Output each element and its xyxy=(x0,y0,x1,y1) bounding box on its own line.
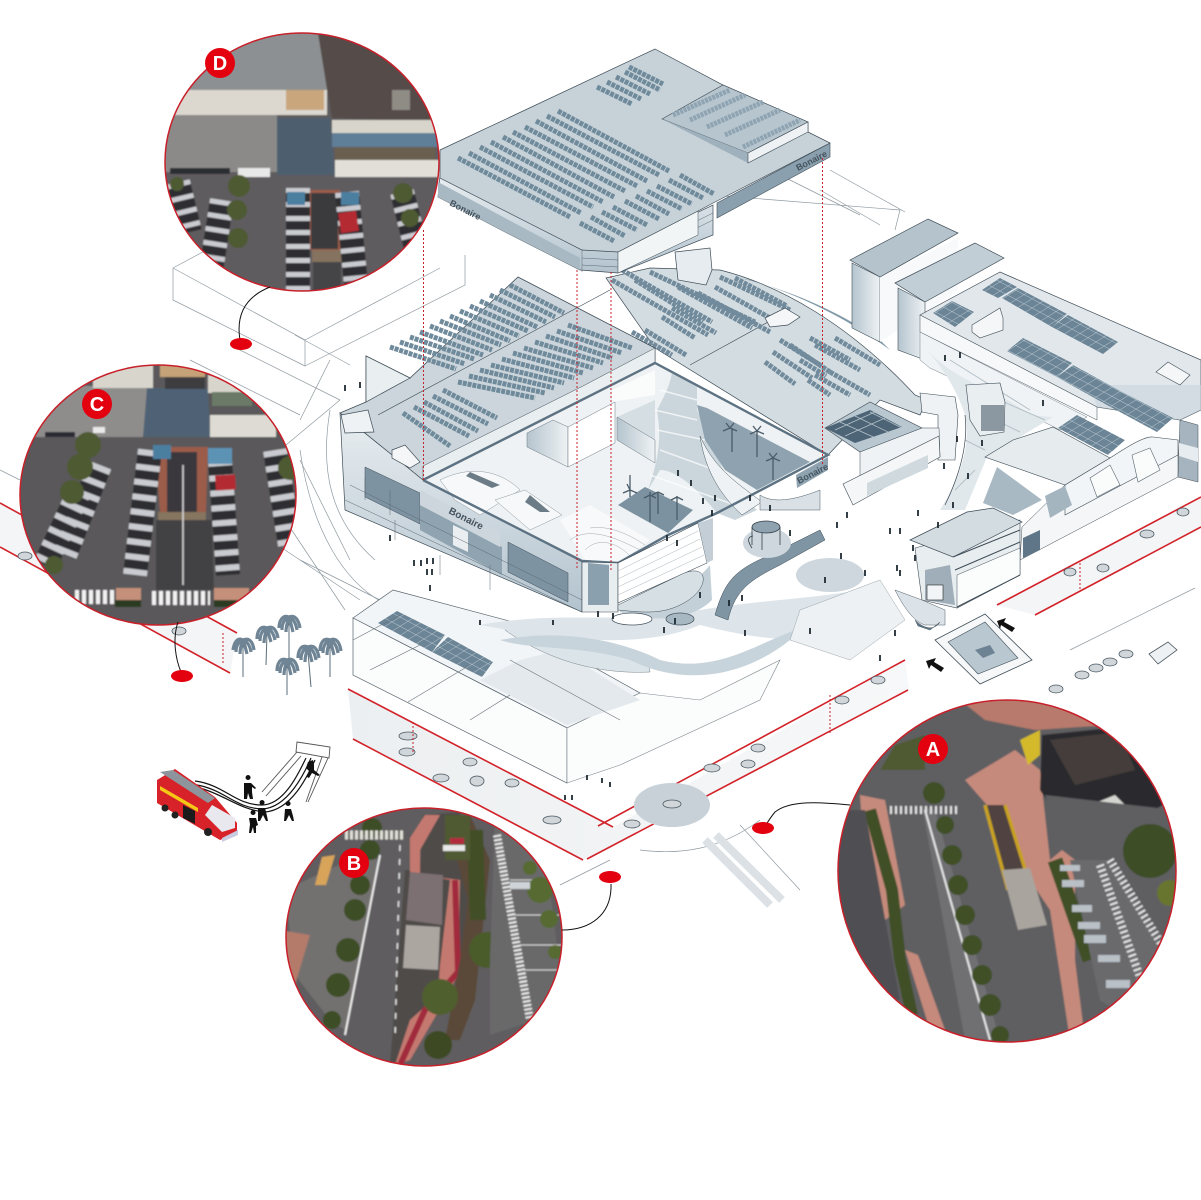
palms in interior xyxy=(623,423,780,522)
entrance building xyxy=(910,508,1022,608)
palm trees xyxy=(233,616,341,695)
middle roof solar rows xyxy=(612,270,880,395)
upper floating roof xyxy=(438,49,830,273)
aerial photo A xyxy=(830,695,1183,1045)
main roof solar rows xyxy=(390,285,632,446)
marker A xyxy=(918,734,948,764)
cutaway interior xyxy=(423,363,828,563)
upper floating roof: Bonaire xyxy=(794,149,829,173)
facade window panels and Bonaire sign: Bonaire xyxy=(447,506,485,533)
leader C xyxy=(171,622,193,682)
photo C border xyxy=(20,365,296,625)
red dotted drop lines xyxy=(223,158,1080,753)
photo D border xyxy=(165,33,439,291)
marker B: B xyxy=(347,853,361,875)
entrance canopy sculpture xyxy=(895,590,945,630)
fire hose xyxy=(195,758,315,812)
kiosk gazebo xyxy=(749,521,780,550)
fountain pad xyxy=(935,614,1032,684)
upper floating roof: Bonaire xyxy=(448,198,482,222)
right wing blocks xyxy=(850,219,1201,430)
lower annex building xyxy=(353,590,780,783)
road shading xyxy=(0,497,1201,905)
right wing solar arrays xyxy=(933,278,1173,432)
marker D xyxy=(205,48,235,78)
roundabout xyxy=(634,783,710,827)
pedestrians xyxy=(345,352,1043,800)
marker C: C xyxy=(90,394,104,416)
rooftop unit: skylight and vehicle xyxy=(341,248,800,468)
middle block with dark skylight xyxy=(825,402,940,505)
marker C xyxy=(82,389,112,419)
marker A: A xyxy=(926,739,940,761)
black direction arrows xyxy=(926,618,1015,672)
facade window panels and Bonaire sign xyxy=(345,467,582,612)
main building roof and facade xyxy=(340,277,655,612)
photo B border xyxy=(286,808,562,1066)
ground plan ghost outlines xyxy=(0,170,1195,890)
plaza ribbons xyxy=(480,528,905,675)
middle roof xyxy=(606,268,927,455)
street cars xyxy=(18,508,1189,828)
corner entrance and curved wall xyxy=(582,518,713,612)
tunnel entry frame xyxy=(262,742,330,802)
aerial photo B xyxy=(280,800,570,1070)
marker D: D xyxy=(213,53,227,75)
Bonaire sign on cut wall: Bonaire xyxy=(795,462,830,486)
red road lines xyxy=(0,497,1201,860)
roof units xyxy=(972,308,1190,385)
aerial photo C xyxy=(15,360,305,630)
upper roof solar rows xyxy=(458,67,714,241)
leader D xyxy=(230,287,270,350)
firefighters xyxy=(244,760,320,833)
fire truck xyxy=(157,769,238,842)
marker B xyxy=(339,848,369,878)
leader A xyxy=(752,803,850,834)
raised roof solar rows xyxy=(673,90,800,147)
atrium corridor xyxy=(920,350,1053,510)
right wing lower wall and wavy roof xyxy=(983,415,1198,560)
aerial photo D xyxy=(160,30,450,295)
cutaway thick section lines xyxy=(423,363,828,563)
photo A border xyxy=(838,700,1176,1042)
leader B xyxy=(562,871,621,930)
